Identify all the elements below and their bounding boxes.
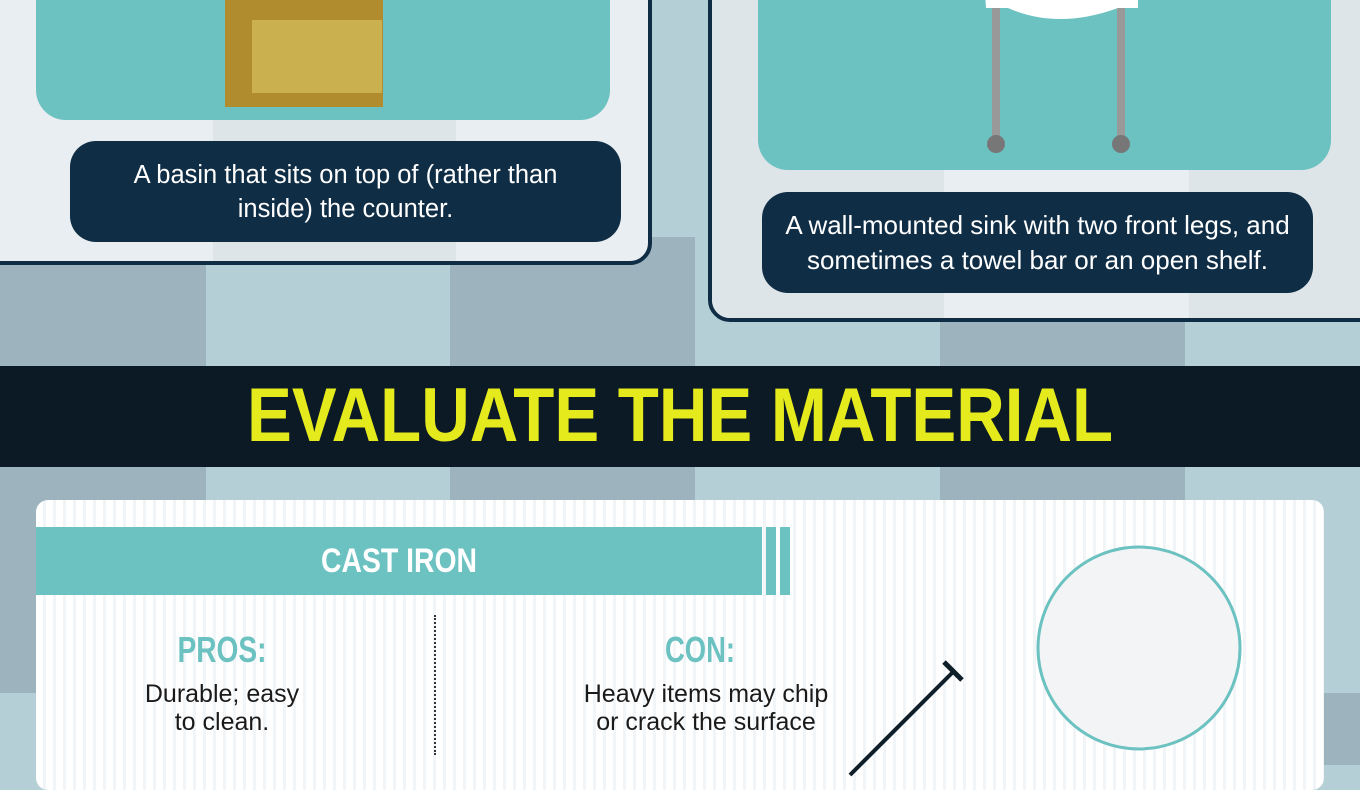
- panel: vessel sink: [0, 0, 652, 265]
- caption: vessel sink: [70, 141, 621, 242]
- pros: [145, 629, 299, 736]
- icon: hammer handle: [848, 660, 964, 776]
- panel: console sink: [708, 0, 1360, 322]
- icon: basin and legs: [985, 0, 1138, 153]
- con: CON:: [665, 629, 735, 669]
- heading bar: cast iron: [36, 527, 790, 595]
- illustration: vessel sink on counter: [36, 0, 610, 120]
- con: [584, 629, 828, 736]
- heading bar: cast iron: CAST IRON: [321, 542, 477, 580]
- pros: PROS:: [178, 629, 266, 669]
- title banner: [0, 366, 1360, 467]
- divider: [434, 615, 436, 755]
- caption: vessel sink: inside) the counter.: [238, 194, 453, 222]
- caption: vessel sink: A basin that sits on top of (rather than: [134, 160, 557, 188]
- title banner: EVALUATE THE MATERIAL: [247, 373, 1113, 458]
- caption: console sink: [762, 192, 1313, 293]
- caption: console sink: A wall-mounted sink with two front legs, and: [785, 210, 1290, 240]
- icon: sink basin circle: [1036, 546, 1242, 750]
- icon: basin: [225, 0, 383, 107]
- pros: Durable; easy: [145, 680, 299, 708]
- pros: to clean.: [175, 708, 269, 736]
- caption: console sink: sometimes a towel bar or an open shelf.: [807, 244, 1268, 274]
- panel: cast iron: [36, 500, 1324, 790]
- con: or crack the surface: [596, 708, 816, 736]
- illustration: console sink: [758, 0, 1331, 170]
- con: Heavy items may chip: [584, 680, 828, 708]
